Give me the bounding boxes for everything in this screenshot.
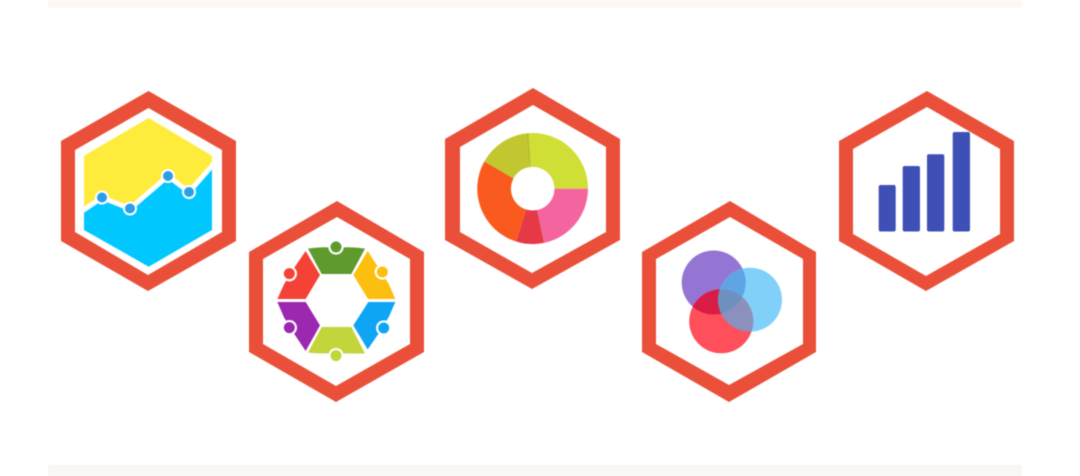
- top band: [48, 0, 1022, 8]
- six figures ring: [277, 239, 395, 363]
- icon: venn diagram in hexagon: [642, 201, 816, 402]
- donut chart: [477, 133, 588, 244]
- bottom band: [48, 465, 1022, 476]
- data points: [95, 169, 196, 216]
- hexagon frame: [839, 91, 1014, 291]
- overlapping circles: [682, 250, 782, 353]
- icon: donut chart in hexagon: [445, 88, 620, 289]
- yellow area: [84, 118, 212, 210]
- icon: people circle in hexagon: [249, 201, 424, 402]
- icon: bar chart in hexagon: [839, 91, 1014, 291]
- white trend line: [82, 164, 214, 211]
- blue area: [84, 166, 212, 267]
- icon: area chart in hexagon: [61, 91, 236, 291]
- hexagon frame: [642, 201, 816, 402]
- bars: [879, 132, 970, 232]
- hexagon frame: [249, 201, 424, 402]
- hexagon frame: [445, 88, 620, 289]
- hexagon frame: [61, 91, 236, 291]
